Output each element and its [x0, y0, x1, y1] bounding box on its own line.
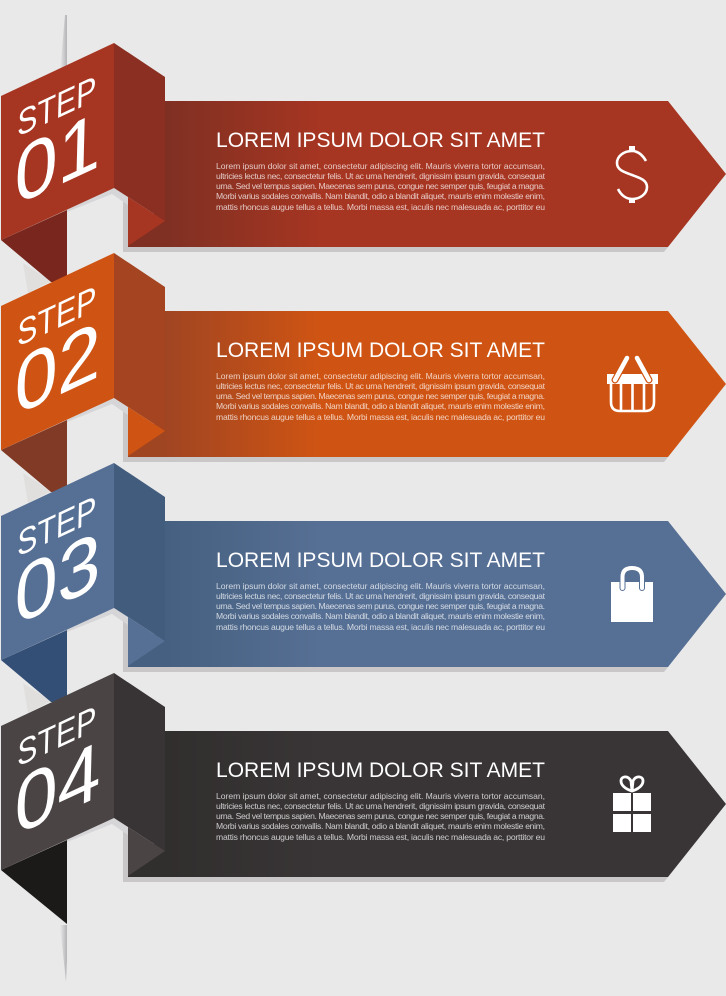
tail shadow: [23, 263, 51, 293]
body text: [216, 581, 546, 632]
inner triangle: [128, 827, 165, 876]
step number: 01: [14, 92, 102, 223]
body text: Morbi varius sodales convallis. Nam blandit, odio a blandit aliquet, mauris enim molestie enim,: [216, 401, 545, 411]
body text: Morbi varius sodales convallis. Nam blandit, odio a blandit aliquet, mauris enim molestie enim,: [216, 611, 545, 621]
body text: ultricies lectus nec, consectetur felis. Ut ac urna hendrerit, dignissim ipsum gravida, consequat: [216, 801, 546, 811]
body text: mattis rhoncus augue tellus a tellus. Morbi massa est, iaculis nec malesuada ac, porttitor eu: [216, 202, 545, 212]
inner triangle: [128, 407, 165, 456]
step 3: [1, 463, 726, 713]
body text: urna. Sed vel tempus sapien. Maecenas sem purus, congue nec semper quis, feugiat a magna.: [216, 181, 545, 191]
heading: LOREM IPSUM DOLOR SIT AMET: [216, 758, 545, 782]
panel shadow: [67, 188, 128, 212]
step label: STEP: [17, 278, 97, 356]
arrow shadow: [123, 617, 668, 672]
panel shadow: [67, 818, 128, 842]
top spine shadow: [60, 15, 67, 72]
heading: LOREM IPSUM DOLOR SIT AMET: [216, 338, 545, 362]
icon: dollar: [617, 146, 647, 203]
step label: STEP: [17, 488, 97, 566]
step number: 04: [14, 722, 102, 853]
tail fold: [1, 840, 67, 924]
side panel: [114, 253, 165, 431]
body text: mattis rhoncus augue tellus a tellus. Morbi massa est, iaculis nec malesuada ac, porttitor eu: [216, 622, 545, 632]
body text: ultricies lectus nec, consectetur felis. Ut ac urna hendrerit, dignissim ipsum gravida, consequat: [216, 591, 546, 601]
body text: urna. Sed vel tempus sapien. Maecenas sem purus, congue nec semper quis, feugiat a magna.: [216, 391, 545, 401]
icon: basket: [607, 358, 658, 411]
body text: [216, 161, 546, 212]
step 4: [1, 673, 726, 924]
side panel: [114, 463, 165, 641]
panel shadow: [67, 398, 128, 422]
body text: [216, 791, 546, 842]
body text: Lorem ipsum dolor sit amet, consectetur adipiscing elit. Mauris viverra tortor accumsan,: [216, 791, 545, 801]
front panel: [1, 673, 114, 870]
body text: mattis rhoncus augue tellus a tellus. Morbi massa est, iaculis nec malesuada ac, porttitor eu: [216, 412, 545, 422]
heading: LOREM IPSUM DOLOR SIT AMET: [216, 128, 545, 152]
step label: STEP: [17, 68, 97, 146]
step 1: [1, 43, 726, 293]
body text: urna. Sed vel tempus sapien. Maecenas sem purus, congue nec semper quis, feugiat a magna.: [216, 811, 545, 821]
tail shadow: [23, 683, 51, 713]
arrow banner: [128, 101, 726, 247]
body text: Morbi varius sodales convallis. Nam blandit, odio a blandit aliquet, mauris enim molestie enim,: [216, 821, 545, 831]
tail fold: [1, 420, 67, 492]
inner triangle: [128, 617, 165, 666]
step number: 03: [14, 512, 102, 643]
arrow shadow: [123, 407, 668, 462]
tail fold: [1, 210, 67, 282]
tail shadow: [23, 473, 51, 503]
arrow banner: [128, 521, 726, 667]
body text: ultricies lectus nec, consectetur felis. Ut ac urna hendrerit, dignissim ipsum gravida, consequat: [216, 381, 546, 391]
heading: LOREM IPSUM DOLOR SIT AMET: [216, 548, 545, 572]
body text: Morbi varius sodales convallis. Nam blandit, odio a blandit aliquet, mauris enim molestie enim,: [216, 191, 545, 201]
body text: Lorem ipsum dolor sit amet, consectetur adipiscing elit. Mauris viverra tortor accumsan,: [216, 581, 545, 591]
icon: gift: [613, 777, 651, 832]
step 2: [1, 253, 726, 503]
front panel: [1, 43, 114, 240]
inner triangle: [128, 197, 165, 246]
icon: shopping bag: [611, 568, 653, 622]
arrow shadow: [123, 827, 668, 882]
front panel: [1, 253, 114, 450]
panel shadow: [67, 608, 128, 632]
front panel: [1, 463, 114, 660]
body text: Lorem ipsum dolor sit amet, consectetur adipiscing elit. Mauris viverra tortor accumsan,: [216, 371, 545, 381]
arrow shadow: [123, 197, 668, 252]
body text: [216, 371, 546, 422]
body text: mattis rhoncus augue tellus a tellus. Morbi massa est, iaculis nec malesuada ac, porttitor eu: [216, 832, 545, 842]
bottom spine shadow: [60, 925, 67, 982]
body text: urna. Sed vel tempus sapien. Maecenas sem purus, congue nec semper quis, feugiat a magna.: [216, 601, 545, 611]
arrow banner: [128, 311, 726, 457]
arrow banner: [128, 731, 726, 877]
tail fold: [1, 630, 67, 702]
body text: ultricies lectus nec, consectetur felis. Ut ac urna hendrerit, dignissim ipsum gravida, consequat: [216, 171, 546, 181]
body text: Lorem ipsum dolor sit amet, consectetur adipiscing elit. Mauris viverra tortor accumsan,: [216, 161, 545, 171]
step number: 02: [14, 302, 102, 433]
side panel: [114, 43, 165, 221]
step label: STEP: [17, 698, 97, 776]
side panel: [114, 673, 165, 851]
